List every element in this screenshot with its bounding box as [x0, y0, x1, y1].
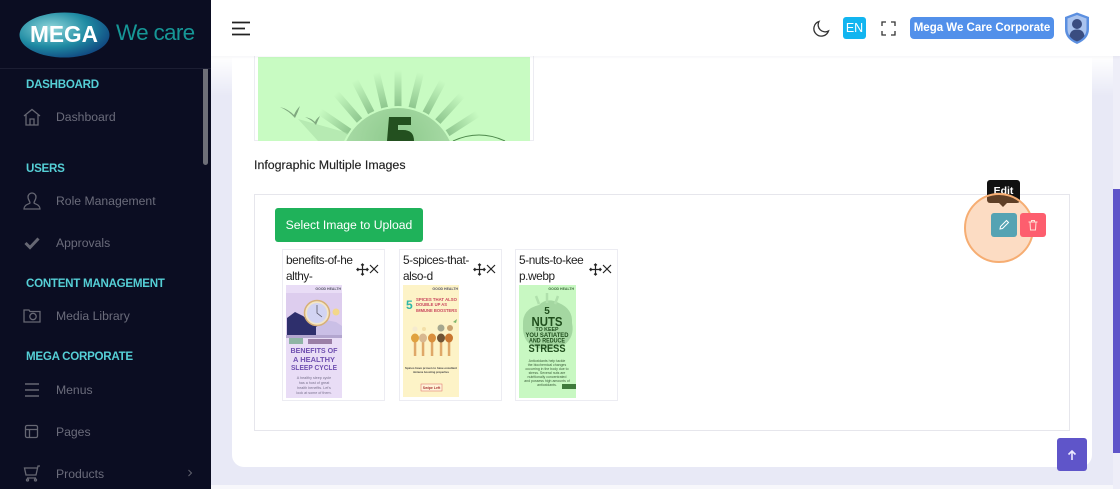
bottom page strip: [211, 485, 1113, 489]
thumbnail 2: Spices have proven to have excellent: [405, 366, 457, 370]
click highlight circle: [964, 193, 1034, 263]
language badge: EN: EN: [846, 21, 863, 35]
thumbnail 2: GOOD HEALTH: [432, 287, 458, 291]
section: Mega Corporate: MEGA CORPORATE: [26, 350, 133, 363]
logo oval: [20, 12, 110, 58]
thumbnail 3: nutritionally concentrated: [528, 375, 567, 379]
icon: layout: [24, 424, 38, 438]
tooltip: Edit: Edit: [994, 185, 1013, 197]
file name 1: benefits-of-he: [286, 253, 353, 267]
thumbnail 2: DOUBLE UP AS: [416, 302, 447, 307]
thumbnail 3: 5: [544, 306, 550, 317]
thumbnail 2: immune boosting properties: [413, 370, 449, 374]
image card 1: benefits of healthy sleep cycle: [282, 249, 385, 401]
file name 2: also-d: [403, 269, 433, 283]
section: Users: USERS: [26, 162, 65, 175]
delete button: [1020, 213, 1046, 237]
logo oval: MEGA: [30, 21, 98, 47]
heading: Infographic Multiple Images: Infographic Multiple Images: [254, 158, 406, 172]
icon: move 1: [356, 263, 369, 276]
thumbnail 2: 5: [406, 298, 413, 312]
button: Select Image to Upload: [275, 208, 423, 242]
thumbnail 3: stress. Several nuts are: [529, 371, 565, 375]
thumbnail 3: and possess high amounts of: [524, 379, 570, 383]
icon: home: [24, 108, 40, 126]
thumbnail 1: has a host of great: [299, 381, 329, 385]
thumbnail 3: [519, 285, 576, 398]
upload panel: [254, 194, 1070, 431]
icon: close 3: [602, 264, 612, 274]
file name 1: [286, 253, 353, 283]
sidebar scrollbar: [203, 69, 208, 165]
file name 3: p.webp: [519, 269, 555, 283]
icon: menu: [232, 22, 250, 36]
icon: trash: [1028, 220, 1038, 230]
user badge: Mega We Care Corporate: Mega We Care Corporate: [914, 22, 1050, 34]
thumbnail 3: NUTS: [532, 315, 562, 329]
icon: cart: [24, 465, 40, 482]
thumbnail 2: SPICES THAT ALSO: [416, 297, 458, 302]
scrollbar thumb: [1113, 189, 1120, 453]
image card 3: 5 nuts: [515, 249, 618, 401]
icon: chevron: [188, 470, 192, 476]
file name 3: [519, 253, 584, 283]
icon: user: [23, 192, 41, 210]
menu item: Pages: Pages: [56, 425, 91, 439]
tooltip arrow: [999, 203, 1007, 207]
thumbnail 1: A healthy sleep cycle: [297, 376, 331, 380]
file name 3: 5-nuts-to-kee: [519, 253, 583, 267]
section: Dashboard: DASHBOARD: [26, 78, 99, 91]
menu item: Role Management: Role Management: [56, 194, 156, 208]
thumbnail 3: AND REDUCE: [529, 338, 565, 344]
file name 2: [403, 253, 469, 283]
menu item: Products: Products: [56, 467, 104, 481]
icon: arrow up: [1068, 450, 1076, 460]
image card 2: 5 spices: [399, 249, 502, 401]
icon: close 1: [370, 264, 378, 274]
icon: close 2: [486, 264, 496, 274]
icon: list: [25, 383, 39, 397]
thumbnail 3: YOU SATIATED: [526, 333, 569, 339]
thumbnail 3: Antioxidants help tackle: [529, 359, 565, 363]
icon: pencil: [999, 220, 1010, 230]
section: Content Management: CONTENT MANAGEMENT: [26, 277, 165, 290]
icon: camera: [23, 309, 41, 323]
icon: move 2: [473, 263, 486, 276]
thumbnail 3: antioxidants.: [537, 383, 557, 387]
thumbnail 3: the biochemical changes: [528, 363, 567, 367]
logo: Mega We care: [0, 0, 211, 69]
language badge: EN: [843, 17, 866, 39]
thumbnail 1: SLEEP CYCLE: [291, 365, 337, 372]
file name 1: althy-: [286, 269, 312, 283]
thumbnail 3: GOOD HEALTH: [548, 287, 574, 291]
thumbnail 2: IMMUNE BOOSTERS: [416, 308, 457, 313]
thumbnail 1: look at some of them.: [296, 391, 332, 395]
icon: user shield: [1065, 12, 1089, 44]
thumbnail 3: STRESS: [528, 343, 566, 355]
thumbnail 3: occurring in the body due to: [525, 367, 569, 371]
thumbnail 2: Swipe Left: [423, 386, 441, 390]
tooltip: Edit: [987, 180, 1020, 203]
top header: [211, 0, 1120, 56]
button: Select Image to Upload: Select Image to Upload: [286, 218, 412, 232]
preview image: 5 nuts infographic crop: [254, 40, 534, 141]
thumbnail 1: health benefits. Let's: [297, 386, 331, 390]
edit button: [991, 213, 1017, 237]
icon: moon: [813, 20, 830, 37]
thumbnail 1: BENEFITS OF: [290, 348, 338, 355]
icon: move 3: [589, 263, 602, 276]
sidebar: [0, 0, 211, 489]
header shadow fade: [211, 56, 1120, 96]
thumbnail 1: A HEALTHY: [293, 357, 335, 364]
main card: [232, 40, 1092, 467]
logo wordmark: We care: [116, 20, 194, 45]
page scrollbar: [1113, 56, 1120, 489]
back to top button: [1057, 438, 1087, 471]
menu item: Dashboard: Dashboard: [56, 110, 116, 124]
thumbnail 3: TO KEEP: [536, 327, 559, 333]
icon: check: [24, 238, 40, 250]
menu item: Media Library: Media Library: [56, 309, 130, 323]
thumbnail 1: [286, 285, 342, 398]
user badge: Mega We Care Corporate: [910, 17, 1054, 39]
thumbnail 1: GOOD HEALTH: [315, 287, 341, 291]
menu item: Menus: Menus: [56, 383, 93, 397]
menu item: Approvals: Approvals: [56, 236, 110, 250]
thumbnail 2: [403, 285, 459, 397]
icon: fullscreen: [881, 21, 896, 36]
file name 2: 5-spices-that-: [403, 253, 469, 267]
